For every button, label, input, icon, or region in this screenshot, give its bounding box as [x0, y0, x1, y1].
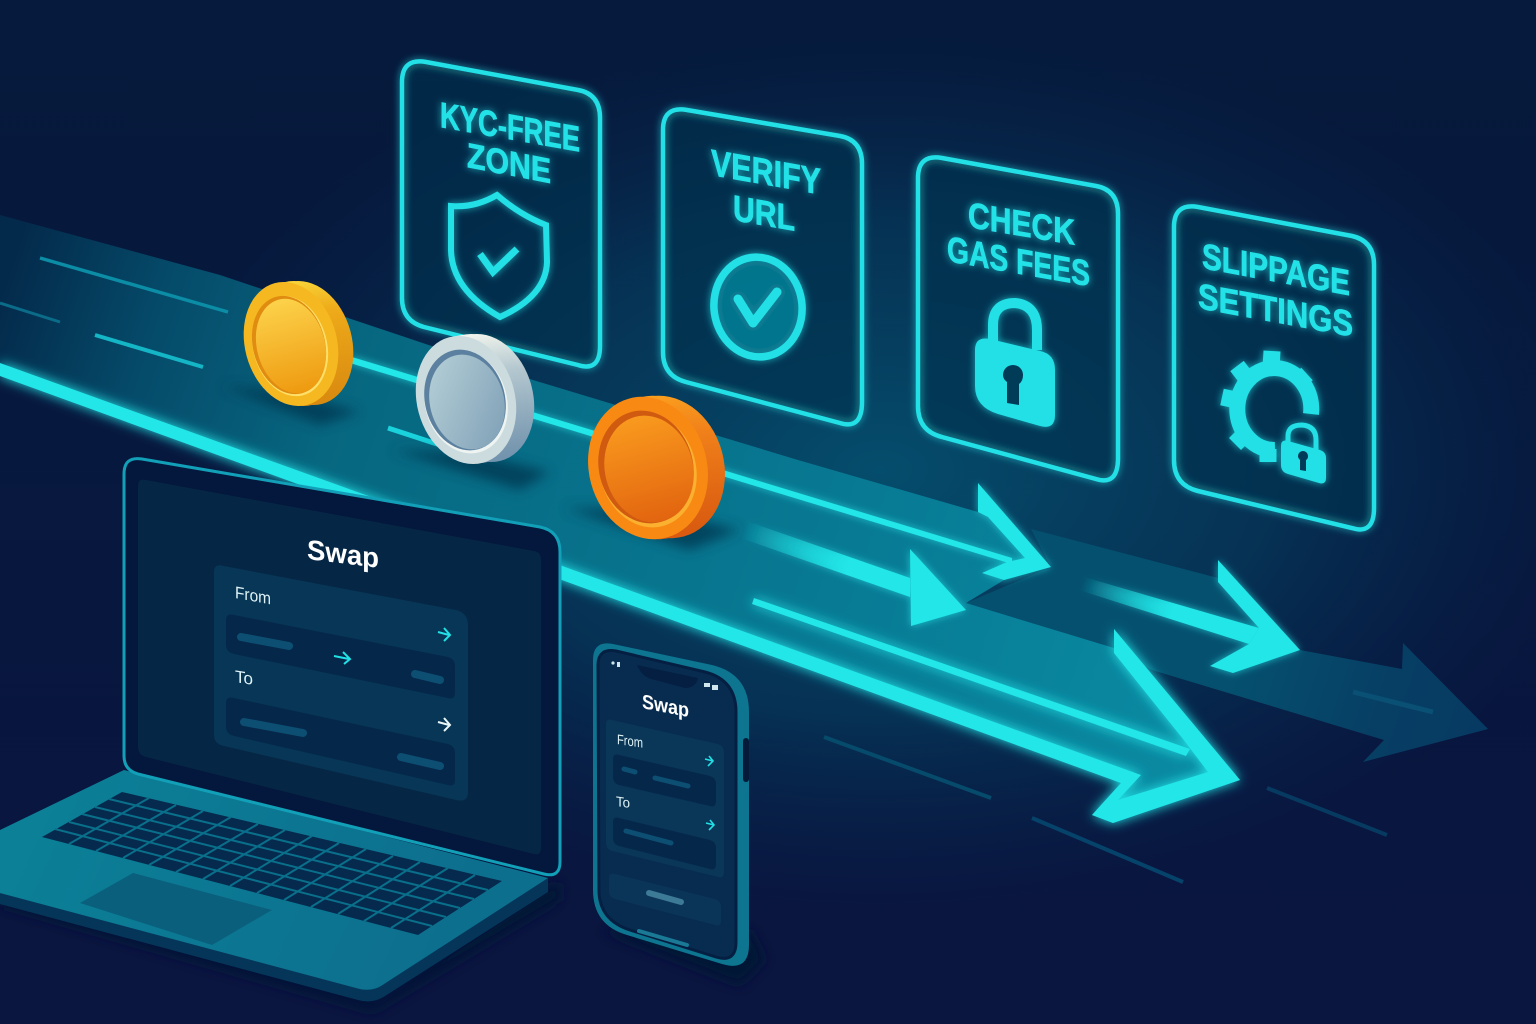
- card label: VERIFY: [711, 141, 821, 202]
- phone: [593, 643, 765, 985]
- card label: URL: [733, 187, 795, 239]
- card label: ZONE: [467, 136, 551, 191]
- arrow: from row right: [438, 628, 450, 641]
- card frame: [918, 157, 1118, 480]
- arrow 1: [350, 357, 1051, 580]
- phone shadow: [600, 930, 765, 985]
- to row: [226, 698, 455, 785]
- card label: [711, 141, 821, 239]
- laptop shadow: [0, 880, 560, 1012]
- icon: padlock: [975, 303, 1055, 427]
- arrow 5: large main arrow: [0, 363, 1240, 823]
- icon: gear with lock: [1222, 351, 1326, 483]
- laptop screen lid: [124, 459, 560, 875]
- trackpad: [80, 873, 272, 945]
- phone notch: [637, 665, 698, 688]
- card: verify URL: [663, 109, 862, 424]
- keyboard: [42, 792, 502, 935]
- card frame: [1174, 206, 1374, 529]
- card label: [440, 94, 580, 191]
- arrow: to row: [438, 718, 450, 731]
- icon: check circle: [707, 251, 809, 363]
- coin: silver: [402, 323, 548, 475]
- swap form panel: [214, 565, 468, 801]
- card: KYC-free zone: [402, 61, 600, 366]
- phone form panel: [606, 720, 724, 877]
- phone title: Swap: [642, 691, 689, 722]
- icon: shield: [451, 195, 547, 317]
- arrow: from row: [705, 756, 713, 766]
- from label: From: [235, 582, 271, 608]
- card label: [947, 194, 1090, 294]
- phone button: [609, 874, 721, 926]
- coin shadows: [222, 386, 740, 550]
- card label: CHECK: [968, 194, 1075, 253]
- coin: gold: [230, 270, 367, 417]
- card: check gas fees: [918, 157, 1118, 480]
- card label: SLIPPAGE: [1202, 235, 1350, 303]
- from row: [226, 615, 455, 698]
- arrow: from row middle: [334, 652, 350, 664]
- main conveyor band: [0, 215, 1240, 823]
- track dashes: [0, 258, 1433, 882]
- arrow 3: [1060, 560, 1300, 673]
- card frame: [402, 61, 600, 366]
- home bar: [639, 931, 687, 945]
- coin: orange: [572, 382, 741, 553]
- from row: [613, 754, 716, 806]
- from label: From: [617, 731, 643, 751]
- to label: To: [235, 667, 253, 689]
- screen title: Swap: [307, 534, 379, 574]
- laptop base: [0, 770, 548, 1001]
- card: slippage settings: [1174, 206, 1374, 529]
- to row: [613, 818, 716, 869]
- to label: To: [616, 793, 630, 811]
- arrow 2: [735, 517, 966, 626]
- card label: KYC-FREE: [440, 94, 580, 160]
- dim lower arrow track: [966, 529, 1488, 762]
- laptop: [0, 459, 560, 1012]
- card frame: [663, 109, 862, 424]
- arrow: to row: [706, 820, 714, 830]
- phone body: [593, 643, 749, 966]
- phone side button: [743, 738, 749, 782]
- card label: GAS FEES: [947, 228, 1090, 294]
- status icons: [611, 661, 718, 690]
- phone screen: [598, 651, 736, 958]
- card label: [1198, 235, 1353, 345]
- screen display area: [138, 480, 541, 854]
- card label: SETTINGS: [1198, 275, 1353, 345]
